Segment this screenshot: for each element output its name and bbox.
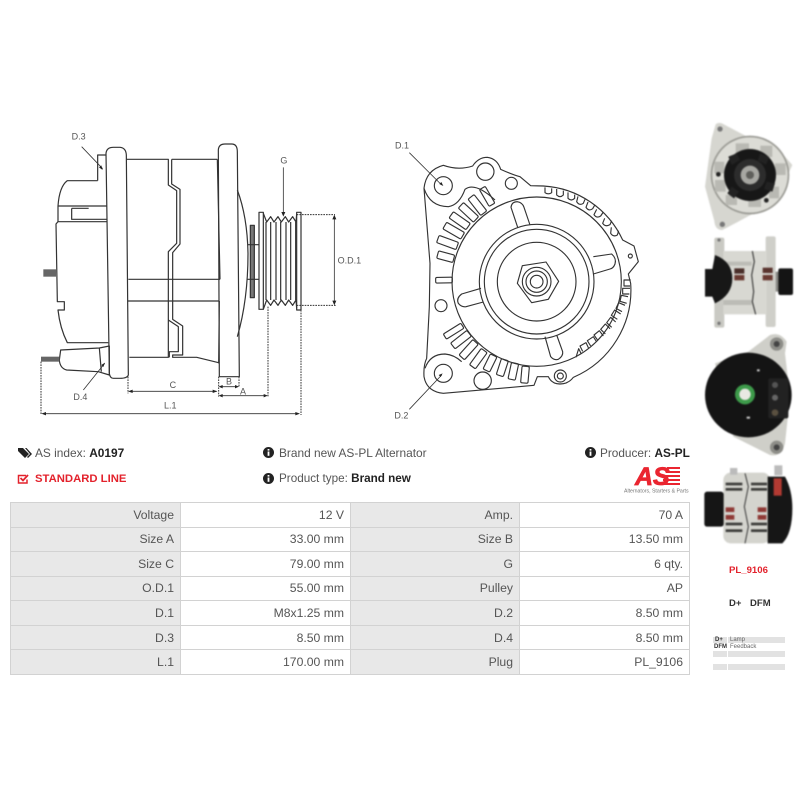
spokes (458, 202, 615, 360)
specification table: D.1 (155, 606, 174, 620)
specification table: PL_9106 (634, 655, 683, 669)
product photos (704, 122, 794, 328)
dimension labels (72, 131, 361, 411)
specification table: 70 A (659, 508, 683, 522)
perimeter teeth (545, 187, 631, 357)
specification table: D.3 (155, 631, 174, 645)
icon: check box (18, 474, 29, 484)
dimension labels: A (240, 386, 246, 396)
dimension labels: B (226, 376, 232, 386)
specification table: D.4 (494, 631, 513, 645)
dimension labels: C (170, 380, 177, 390)
dimension labels: L.1 (164, 401, 177, 411)
AS index: AS index: A0197 (35, 446, 124, 460)
photo: alternator side from opposite (704, 465, 792, 543)
specification table: 8.50 mm (297, 631, 344, 645)
specification table: L.1 (157, 655, 174, 669)
specification table: Pulley (480, 581, 513, 595)
hex nut (517, 262, 559, 303)
specification table: 79.00 mm (290, 557, 344, 571)
photo: rear of alternator (705, 334, 792, 455)
pin legend (713, 636, 785, 670)
specification table: Size A (139, 532, 174, 546)
front view technical drawing (394, 140, 639, 421)
callout lines (409, 153, 442, 409)
specification table: 33.00 mm (290, 532, 344, 546)
specification table: 13.50 mm (629, 532, 683, 546)
callout labels (394, 140, 409, 421)
stator and housing (127, 159, 220, 363)
dimension labels: D.4 (73, 392, 87, 402)
icon: info (263, 447, 274, 458)
connector pins: D+ DFM (729, 598, 771, 609)
specification table: G (504, 557, 513, 571)
studs (41, 269, 59, 362)
specification table: Voltage (133, 508, 174, 522)
front bell (237, 190, 248, 337)
producer: Producer: AS-PL (600, 446, 690, 460)
specification table: AP (667, 581, 683, 595)
specification table: 8.50 mm (636, 631, 683, 645)
callout labels: D.1 (395, 140, 409, 150)
specification table: Size B (478, 532, 513, 546)
dimension labels: O.D.1 (338, 256, 361, 266)
specification table: Plug (489, 655, 513, 669)
photo: side of alternator (705, 236, 793, 328)
photo: front of alternator (705, 123, 792, 230)
specification table: O.D.1 (142, 581, 174, 595)
pin legend: DFM (714, 644, 727, 650)
dimension labels: D.3 (72, 131, 86, 141)
specification table: D.2 (494, 606, 513, 620)
rear flange (106, 147, 128, 378)
rotor rings (452, 197, 621, 366)
specification table: 8.50 mm (636, 606, 683, 620)
rear cover (56, 155, 109, 375)
pulley (247, 212, 301, 310)
specification table: 6 qty. (654, 557, 683, 571)
specification table: 12 V (319, 508, 344, 522)
standard line: STANDARD LINE (35, 473, 126, 485)
front flange (218, 144, 239, 377)
AS logo (624, 464, 689, 494)
specification table: Amp. (485, 508, 513, 522)
brand new note: Brand new AS-PL Alternator (279, 446, 427, 460)
dimension labels: G (280, 155, 287, 165)
icon: tags (18, 448, 32, 458)
pin legend: D+ (715, 637, 723, 643)
connector code: PL_9106 (729, 565, 768, 576)
icon: info (585, 447, 596, 458)
specification table: Size C (138, 557, 174, 571)
product type: Product type: Brand new (279, 472, 411, 485)
dimension lines (41, 215, 337, 415)
housing outline (424, 157, 638, 393)
specification table: M8x1.25 mm (274, 606, 344, 620)
specification table: 55.00 mm (290, 581, 344, 595)
specification table: 170.00 mm (283, 655, 344, 669)
specification table (10, 502, 690, 675)
mounting holes (434, 163, 632, 389)
pin legend: Feedback (730, 644, 756, 650)
pin legend: Lamp (730, 637, 745, 643)
icon: info (263, 473, 274, 484)
callout labels: D.2 (394, 411, 408, 421)
lower-left cooling slots (436, 186, 529, 383)
side view technical drawing (40, 131, 361, 416)
AS logo: Alternators, Starters & Parts (624, 488, 689, 494)
mounting boss lines (424, 187, 495, 368)
